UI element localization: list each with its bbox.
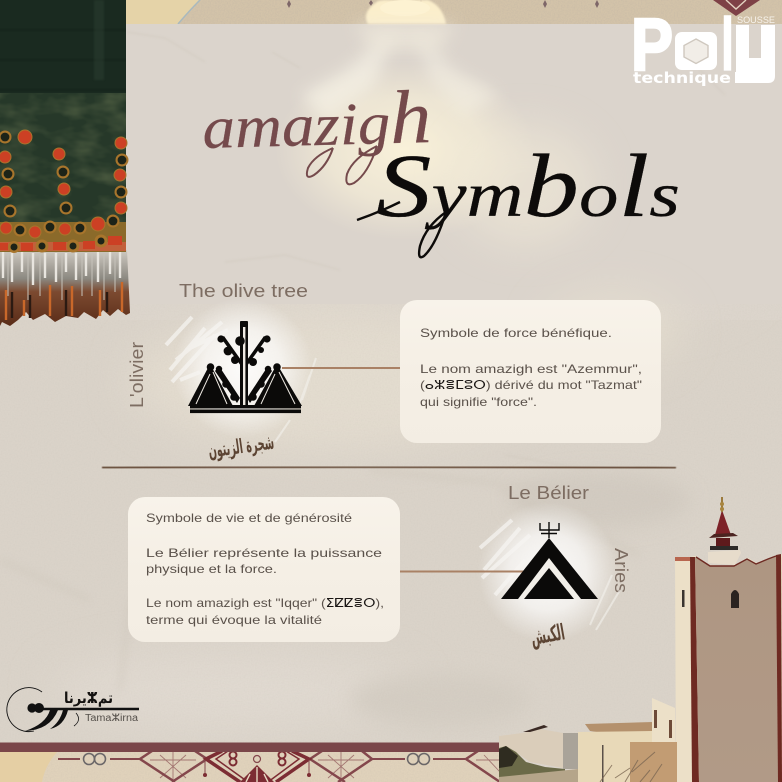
logo word: Poly: y <box>735 12 775 84</box>
card: aries description <box>128 497 400 642</box>
card: aries description: terme qui évoque la vitalité <box>146 613 322 627</box>
heading: Le Bélier: Le Bélier <box>508 483 589 503</box>
section: aries <box>400 483 631 651</box>
carpet fringe <box>0 250 130 326</box>
title word: Symbols: Symbols <box>376 137 680 236</box>
card: olive tree description: (ⴰⵣⴻⵎⵓⵔ ) dérivé du mot "Tazmat" <box>420 378 642 392</box>
building left wall <box>499 729 563 768</box>
arabic label: ram: الكبش <box>529 620 567 651</box>
logo arabic name: تمⵣيرنا <box>64 689 113 707</box>
logo: Polytechnique Sousse: technique <box>633 69 731 87</box>
icon: olive tree symbol <box>188 321 302 413</box>
top decorative strip <box>126 0 782 24</box>
logo word: Poly: P <box>631 3 673 86</box>
card: aries description: Le Bélier représente la puissance <box>146 546 382 560</box>
building right wall <box>578 731 655 782</box>
label: Aries: Aries <box>611 548 631 593</box>
top paper panel edge <box>126 24 782 304</box>
ornament: line and rings <box>58 754 465 764</box>
connector line <box>400 570 528 572</box>
section: olive tree <box>127 281 400 463</box>
card: olive tree description: Le nom amazigh est "Azemmur", <box>420 362 642 376</box>
carpet body <box>0 0 126 252</box>
minaret <box>675 497 782 782</box>
footer: band and pattern <box>0 742 500 782</box>
brush halo <box>478 502 620 642</box>
logo word: Poly: l <box>721 3 734 86</box>
logo latin name: Tamaⵣirna <box>85 713 138 724</box>
minaret roof <box>708 550 741 565</box>
card: olive tree description: Symbole de force bénéfique. <box>420 326 612 340</box>
section: olive tree: شجرة الزيتون <box>207 430 275 463</box>
carpet <box>0 0 130 326</box>
brush halo <box>166 298 316 442</box>
crease details <box>127 32 725 470</box>
title <box>201 75 680 257</box>
carpet flowers red <box>0 130 128 253</box>
logo word: Poly <box>634 15 775 83</box>
card: aries description: Symbole de vie et de générosité <box>146 511 352 525</box>
divider <box>102 467 676 468</box>
card: aries description: physique et la force. <box>146 562 277 576</box>
connector line <box>282 367 400 369</box>
title word: amazigh: amazigh <box>201 75 432 165</box>
card: olive tree description: qui signifie "force". <box>420 395 537 409</box>
minaret window <box>731 590 739 608</box>
heading: The olive tree: The olive tree <box>179 281 308 301</box>
logo: Polytechnique Sousse: SOUSSE <box>737 15 775 25</box>
ornament: diamonds <box>140 751 500 782</box>
icon: ram symbol <box>501 522 598 599</box>
maroon band <box>0 742 499 752</box>
card: olive tree description <box>400 300 661 443</box>
light rays glow <box>275 0 682 370</box>
logo: Tamazirna <box>7 688 139 732</box>
logo swirl mark <box>7 688 139 732</box>
card: aries description: Le nom amazigh est "Iqqer" ( ⵉⵇⵇⴻⵔ ), <box>146 596 384 610</box>
olive tree right mountain <box>254 364 302 406</box>
building roof <box>585 722 654 734</box>
village building <box>499 698 677 782</box>
olive tree left mountain <box>188 364 233 406</box>
logo: Polytechnique Sousse <box>633 15 775 86</box>
label: L'olivier: L'olivier <box>127 342 147 408</box>
